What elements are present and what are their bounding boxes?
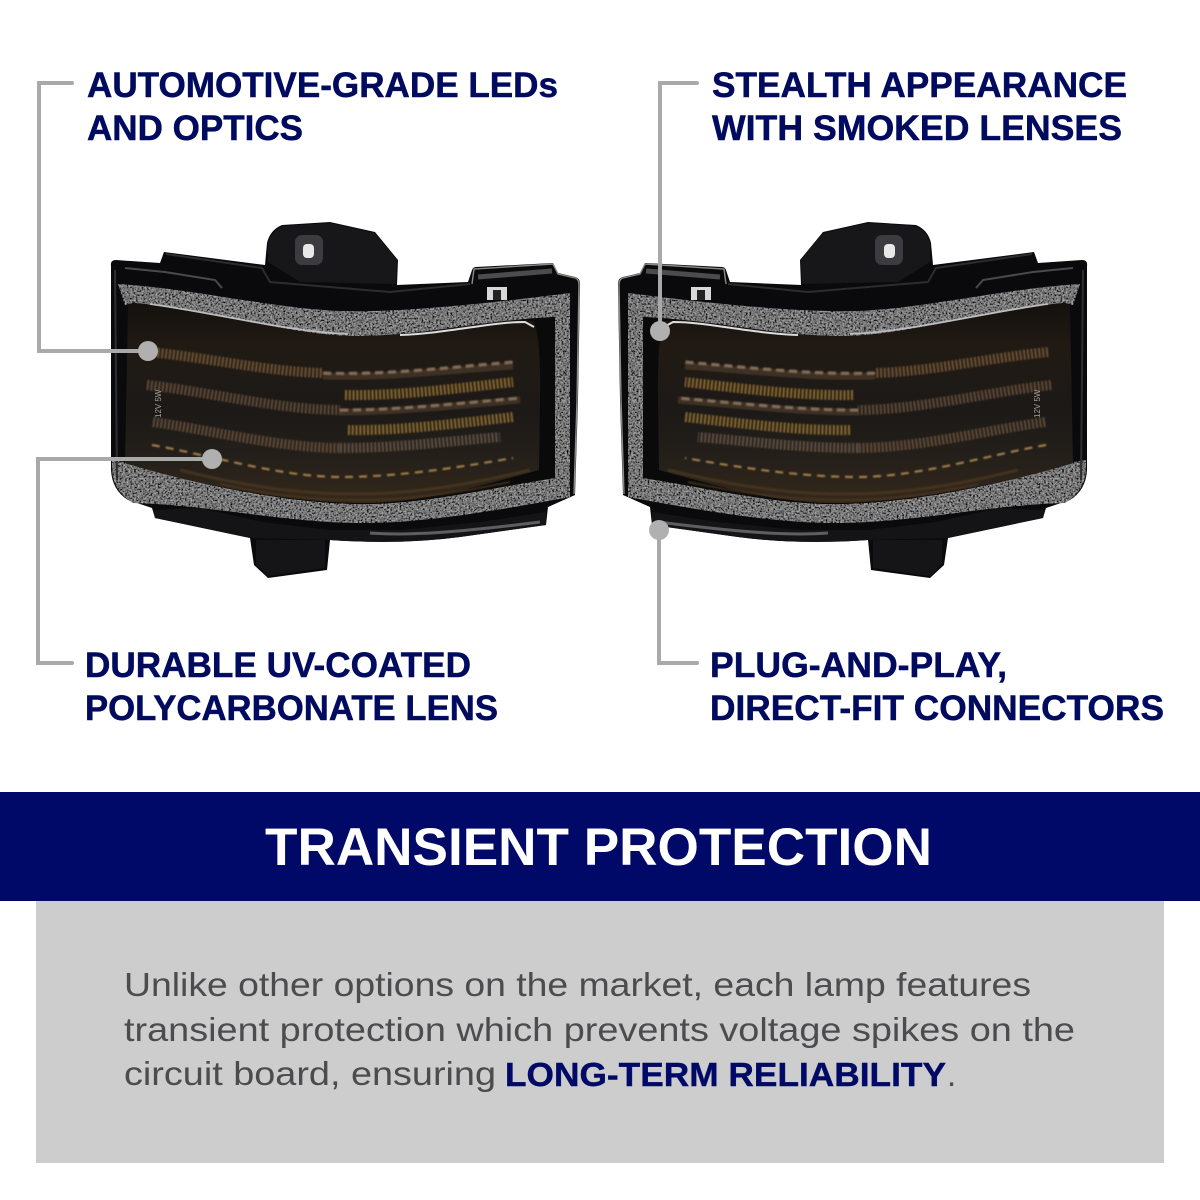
callout connector: polycarbonate lens — [38, 449, 222, 663]
callout text: plug-and-play: PLUG-AND-PLAY, — [710, 646, 1007, 685]
description panel: circuit board, ensuring — [124, 1055, 496, 1092]
callout connector: smoked lenses — [650, 83, 697, 341]
callout text: stealth appearance: STEALTH APPEARANCE — [712, 66, 1127, 105]
right smoked LED lamp photo — [618, 222, 1087, 578]
left smoked LED lamp photo — [111, 222, 580, 578]
callout text: plug-and-play: DIRECT-FIT CONNECTORS — [710, 689, 1164, 728]
description panel — [36, 901, 1164, 1163]
description panel: . — [947, 1056, 956, 1093]
callout text: automotive-grade LEDs and optics — [87, 66, 558, 148]
heading band: transient protection — [0, 792, 1200, 901]
callout text: plug-and-play — [710, 646, 1164, 728]
callout connector: direct-fit connectors — [649, 520, 697, 663]
callout text: durable lens: POLYCARBONATE LENS — [85, 689, 498, 728]
callout text: durable lens — [85, 646, 498, 728]
description panel: LONG-TERM RELIABILITY — [505, 1056, 946, 1093]
right smoked LED lamp photo: 12V 5W — [1033, 389, 1042, 418]
callout text: stealth appearance: WITH SMOKED LENSES — [712, 109, 1122, 148]
callout text: durable lens: DURABLE UV-COATED — [85, 646, 471, 685]
description panel: transient protection which prevents voltage spikes on the — [124, 1011, 1075, 1048]
callout text: automotive-grade LEDs and optics: AUTOMOTIVE-GRADE LEDs — [87, 66, 558, 105]
left smoked LED lamp photo: 12V 5W — [154, 389, 163, 418]
callout text: automotive-grade LEDs and optics: AND OPTICS — [87, 109, 303, 148]
callout text: stealth appearance — [712, 66, 1127, 148]
callout connector: automotive-grade LEDs — [39, 83, 158, 361]
description panel: Unlike other options on the market, each lamp features — [124, 966, 1031, 1003]
heading band: transient protection: TRANSIENT PROTECTION — [265, 818, 932, 877]
